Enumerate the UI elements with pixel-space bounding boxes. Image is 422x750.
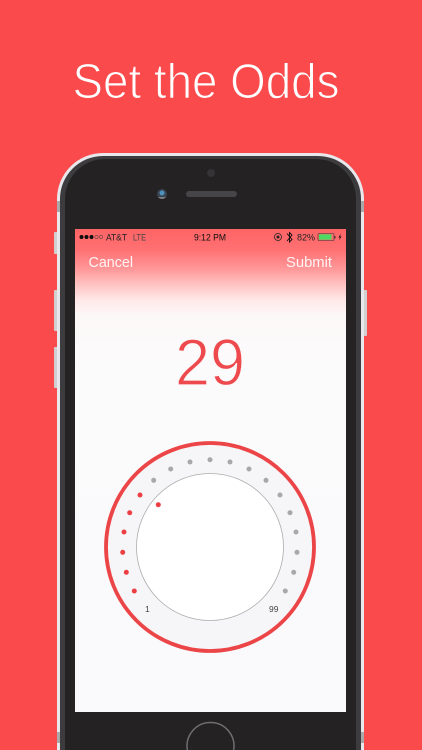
unselected dots (151, 457, 300, 594)
home button (187, 722, 234, 750)
odds number: 29 (175, 325, 245, 399)
screen (75, 229, 346, 712)
dial center (136, 474, 284, 620)
time: 9:12 PM (194, 232, 226, 244)
battery (318, 234, 342, 240)
front camera (157, 189, 167, 199)
dial outer ring (106, 443, 314, 651)
dial maximum label: 99 (269, 604, 279, 614)
selected dots (120, 492, 161, 594)
carrier: AT&T (106, 232, 127, 244)
dial minimum label: 1 (145, 604, 150, 614)
network: LTE (133, 232, 146, 244)
submit button: Submit (286, 255, 332, 271)
title: Set the Odds (72, 55, 340, 109)
status bar (80, 232, 342, 244)
speaker (186, 191, 237, 197)
bluetooth icon (287, 232, 292, 242)
battery percent: 82% (297, 232, 316, 244)
phone body (57, 153, 364, 750)
dial (106, 443, 314, 651)
signal dots (80, 235, 103, 239)
phone (54, 153, 367, 750)
lock icon (274, 234, 282, 240)
cancel button: Cancel (88, 255, 133, 271)
side buttons (54, 232, 367, 388)
front sensor (207, 169, 215, 177)
